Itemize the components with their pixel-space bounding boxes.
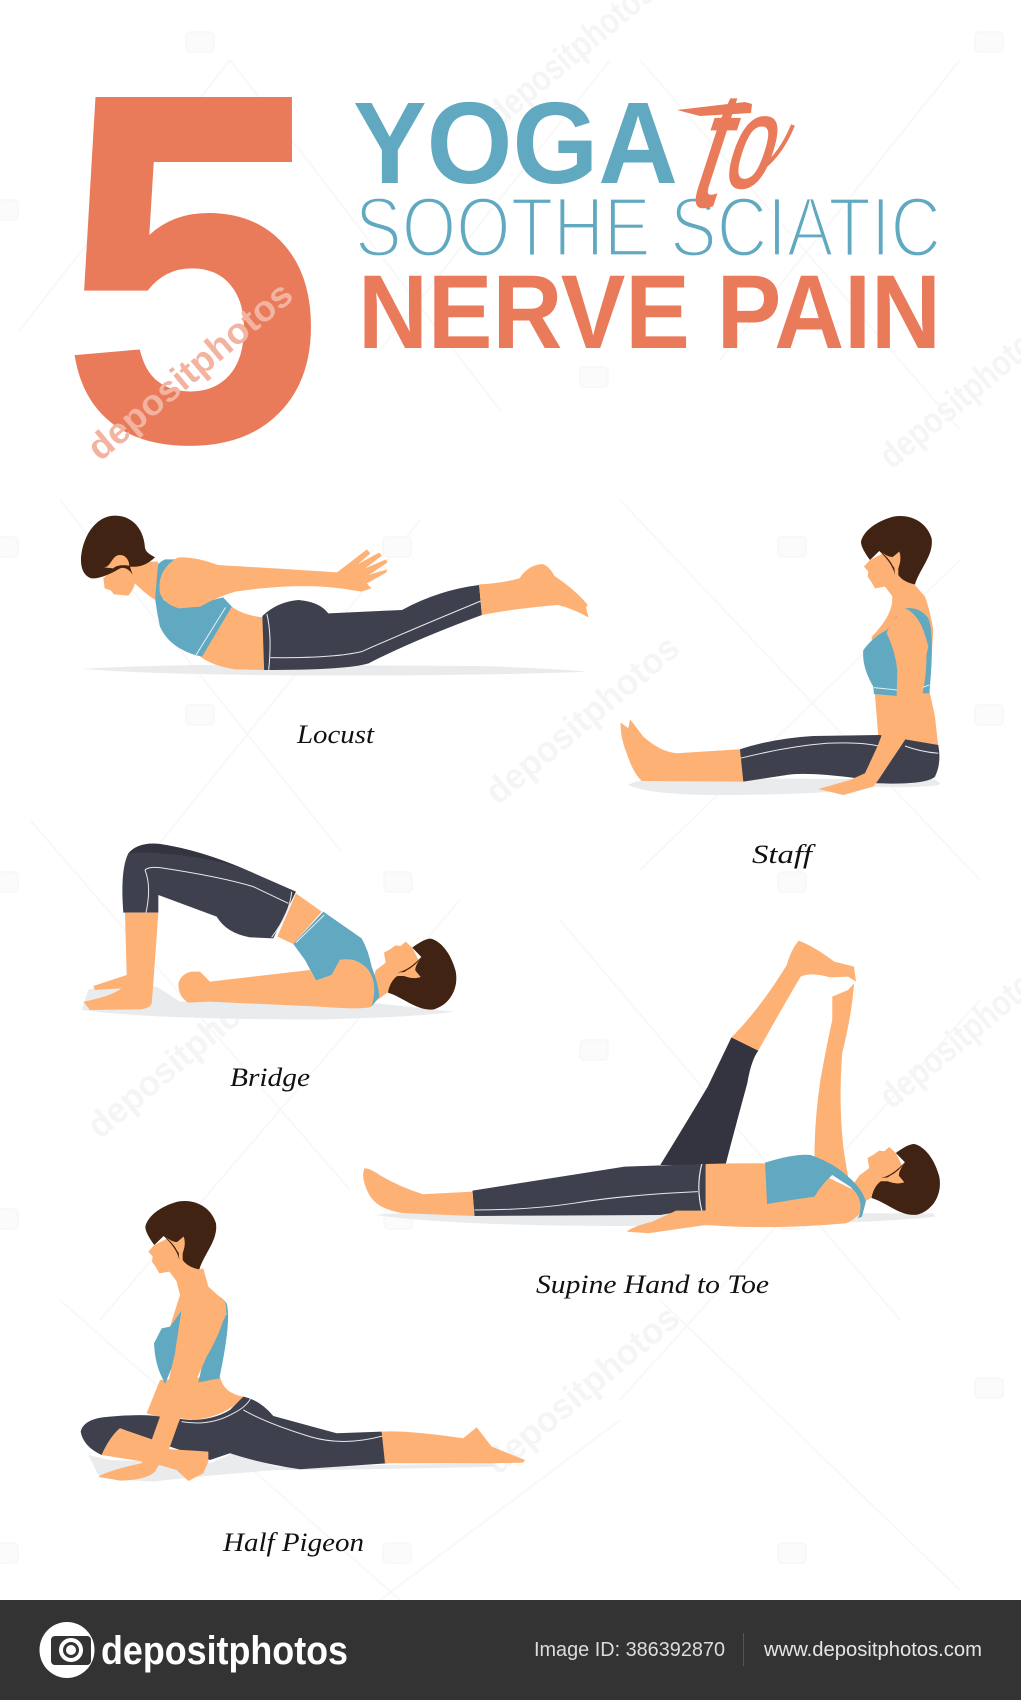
label: Staff: Staff [752,840,817,869]
label: Bridge: Bridge [230,1063,310,1092]
title [60,0,941,548]
figure: supine hand to toe pose [363,941,940,1233]
heading: YOGA: YOGA [353,78,678,208]
figure: staff pose [621,516,940,795]
script word: to [673,58,806,242]
label: Supine Hand to Toe: Supine Hand to Toe [536,1270,769,1299]
hair [872,1144,940,1215]
footer bar [0,1600,1021,1700]
face and neck [374,942,427,1003]
hair [388,939,456,1010]
figure: locust pose [81,516,589,675]
face and neck [854,1147,911,1208]
logo wordmark: depositphotos [101,1629,348,1673]
figure: bridge pose [82,844,456,1019]
figure: half pigeon pose [81,1201,525,1482]
infographic canvas: depositphotos [79,273,300,468]
heading: NERVE PAIN: NERVE PAIN [358,254,941,371]
script word: to: o [711,69,803,215]
website url: www.depositphotos.com [763,1639,982,1661]
label: Locust: Locust [296,720,375,749]
infographic canvas: depositphotos [477,626,687,812]
head [861,516,932,597]
image id: Image ID: 386392870 [534,1639,725,1661]
script word: to: t [673,58,762,242]
icon: camera logo [40,1622,94,1678]
head [145,1201,216,1282]
big numeral 5: 5 [60,0,324,548]
infographic canvas: depositphotos [79,960,289,1146]
infographic canvas: depositphotos [477,1296,687,1482]
label: Half Pigeon: Half Pigeon [222,1528,364,1557]
head [81,516,158,600]
